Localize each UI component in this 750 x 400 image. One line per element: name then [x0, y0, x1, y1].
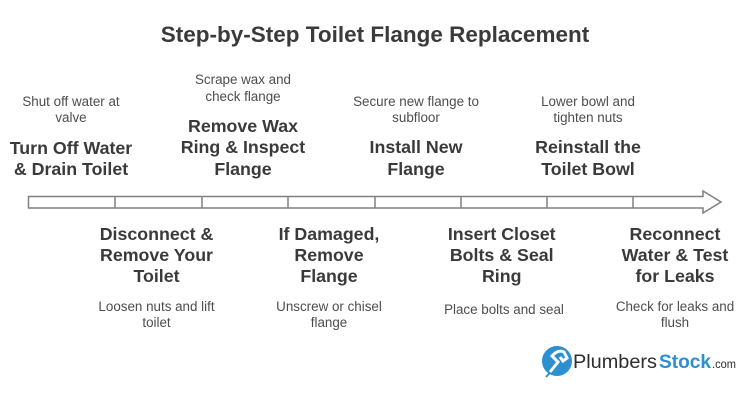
step 8: reconnect water: Water & Test	[622, 245, 728, 265]
step 5: install new flange: Secure new flange to	[353, 94, 479, 109]
step 3: remove wax ring: Ring & Inspect	[181, 137, 305, 157]
step 1: turn off water: valve	[55, 110, 87, 125]
step 4: remove damaged flange	[276, 224, 382, 330]
step 3: remove wax ring: check flange	[205, 89, 281, 104]
step 2: disconnect toilet: toilet	[142, 315, 171, 330]
step 2: disconnect toilet: Loosen nuts and lift	[98, 299, 215, 314]
step 7: reinstall bowl: Reinstall the	[535, 137, 641, 157]
timeline arrow	[28, 191, 721, 213]
step 6: insert closet bolts: Bolts & Seal	[450, 245, 554, 265]
step 8: reconnect water: Reconnect	[630, 224, 721, 244]
logo: PlumbersStock.com: Stock	[659, 352, 711, 373]
step 4: remove damaged flange: Remove	[294, 245, 364, 265]
step 4: remove damaged flange: flange	[311, 315, 347, 330]
step 7: reinstall bowl	[535, 94, 641, 179]
step 3: remove wax ring	[181, 72, 305, 179]
step 6: insert closet bolts: Insert Closet	[448, 224, 556, 244]
step 8: reconnect water: Check for leaks and	[616, 299, 734, 314]
step 4: remove damaged flange: Unscrew or chisel	[276, 299, 382, 314]
step 2: disconnect toilet	[98, 224, 215, 330]
step 2: disconnect toilet: Toilet	[133, 266, 180, 286]
step 8: reconnect water: for Leaks	[635, 266, 715, 286]
logo: PlumbersStock.com: Plumbers	[573, 352, 657, 373]
step 5: install new flange	[353, 94, 479, 179]
step 6: insert closet bolts: Ring	[482, 266, 521, 286]
step 6: insert closet bolts: Place bolts and seal	[444, 302, 564, 317]
step 8: reconnect water: flush	[661, 315, 689, 330]
step 8: reconnect water	[616, 224, 734, 330]
step 7: reinstall bowl: tighten nuts	[553, 110, 623, 125]
step 5: install new flange: Install New	[370, 137, 463, 157]
step 3: remove wax ring: Scrape wax and	[195, 72, 291, 87]
step 1: turn off water: Turn Off Water	[10, 138, 132, 158]
step 7: reinstall bowl: Lower bowl and	[541, 94, 635, 109]
icon: pipe wrench badge	[542, 346, 572, 377]
step 1: turn off water	[10, 94, 132, 179]
step 3: remove wax ring: Flange	[214, 159, 272, 179]
step 5: install new flange: subfloor	[392, 110, 440, 125]
step 3: remove wax ring: Remove Wax	[188, 116, 298, 136]
step 4: remove damaged flange: If Damaged,	[279, 224, 379, 244]
step 5: install new flange: Flange	[387, 159, 445, 179]
step 6: insert closet bolts	[444, 224, 564, 317]
logo: PlumbersStock.com: .com	[712, 357, 736, 371]
logo: PlumbersStock.com	[542, 346, 736, 377]
step 1: turn off water: & Drain Toilet	[14, 159, 128, 179]
step 2: disconnect toilet: Remove Your	[100, 245, 213, 265]
title: Step-by-Step Toilet Flange Replacement	[161, 22, 590, 47]
step 2: disconnect toilet: Disconnect &	[100, 224, 213, 244]
step 1: turn off water: Shut off water at	[22, 94, 120, 109]
step 4: remove damaged flange: Flange	[300, 266, 358, 286]
step 7: reinstall bowl: Toilet Bowl	[541, 159, 635, 179]
